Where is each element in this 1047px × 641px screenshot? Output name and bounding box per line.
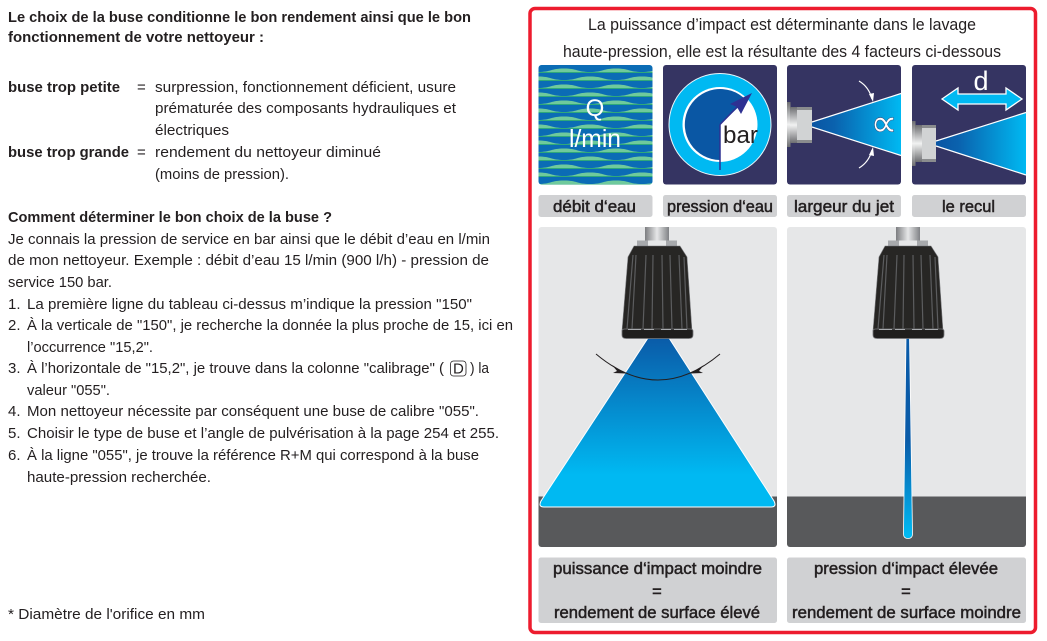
definition: nozzle too large — [8, 144, 381, 183]
numbered steps: À la ligne "055", je trouve la référence R+M qui correspond à la buse — [27, 447, 479, 464]
numbered steps: Mon nettoyeur nécessite par conséquent une buse de calibre "055". — [27, 403, 479, 420]
how-to paragraph: de mon nettoyeur. Exemple : débit d’eau 15 l/min (900 l/h) - pression de — [8, 252, 489, 269]
panel title: haute-pression, elle est la résultante des 4 facteurs ci-dessous — [563, 42, 1001, 61]
ground surface — [538, 496, 777, 547]
panel title — [563, 15, 1001, 61]
factor label: débit d'eau — [538, 195, 652, 217]
icon: pressure gauge: bar — [723, 122, 758, 149]
definition: nozzle too small — [8, 79, 457, 139]
panel: wide jet — [538, 227, 777, 547]
nozzle — [622, 227, 693, 338]
icon: water flow: Q — [586, 95, 604, 122]
nozzle — [873, 227, 944, 338]
needle jet — [904, 338, 912, 538]
definition: nozzle too small: = — [137, 79, 146, 96]
intro heading — [8, 9, 471, 46]
caption: wide jet: rendement de surface élevé — [554, 604, 760, 622]
panel title: La puissance d’impact est déterminante dans le lavage — [588, 15, 976, 34]
footnote: * Diamètre de l'orifice en mm — [8, 606, 205, 623]
caption: narrow jet: rendement de surface moindre — [792, 604, 1021, 622]
icon: jet width: ∝ — [870, 103, 898, 145]
factor label: largeur du jet — [787, 195, 901, 217]
factor label: largeur du jet: largeur du jet — [794, 198, 894, 216]
caption: wide jet — [538, 558, 777, 623]
how-to heading: Comment déterminer le bon choix de la buse ? — [8, 209, 332, 226]
icon: water flow — [538, 65, 652, 184]
panel: impact power frame — [530, 8, 1036, 632]
numbered steps: haute-pression recherchée. — [27, 469, 211, 486]
panel: narrow jet — [787, 227, 1026, 547]
definition: nozzle too small: prématurée des composants hydrauliques et — [155, 100, 457, 117]
icon: pressure gauge — [663, 65, 777, 184]
numbered steps: 3. — [8, 360, 21, 377]
numbered steps: 6. — [8, 447, 21, 464]
how-to paragraph: Je connais la pression de service en bar ainsi que le débit d’eau en l/min — [8, 231, 490, 248]
explanatory text column — [8, 9, 513, 623]
definition: nozzle too large: = — [137, 144, 146, 161]
intro heading: Le choix de la buse conditionne le bon rendement ainsi que le bon — [8, 9, 471, 26]
ground surface — [787, 496, 1026, 547]
numbered steps: D — [453, 360, 464, 378]
icon: jet width — [787, 65, 901, 184]
numbered steps: À l’horizontale de "15,2", je trouve dans la colonne "calibrage" ( — [27, 360, 444, 377]
caption: narrow jet — [787, 558, 1026, 623]
numbered steps: Choisir le type de buse et l’angle de pulvérisation à la page 254 et 255. — [27, 425, 499, 442]
factor label: le recul: le recul — [942, 198, 995, 216]
definition: nozzle too large: (moins de pression). — [155, 166, 289, 183]
caption: narrow jet: = — [901, 583, 911, 601]
factor label: débit d'eau: débit d‘eau — [553, 198, 636, 216]
numbered steps: valeur "055". — [27, 382, 110, 399]
intro heading: fonctionnement de votre nettoyeur : — [8, 29, 264, 46]
numbered steps: À la verticale de "150", je recherche la donnée la plus proche de 15, ici en — [27, 317, 513, 334]
icon: distance: d — [973, 66, 989, 96]
caption: wide jet: puissance d‘impact moindre — [553, 560, 762, 578]
definition: nozzle too small: surpression, fonctionnement déficient, usure — [155, 79, 456, 96]
numbered steps: 5. — [8, 425, 21, 442]
numbered steps — [8, 296, 513, 486]
icon: distance — [912, 65, 1026, 184]
caption: wide jet: = — [652, 583, 662, 601]
factor label: le recul — [912, 195, 1026, 217]
factor label: pression d'eau: pression d‘eau — [667, 198, 773, 216]
numbered steps: 2. — [8, 317, 21, 334]
definition: nozzle too small: buse trop petite — [8, 79, 120, 96]
how-to paragraph — [8, 231, 490, 291]
how-to paragraph: service 150 bar. — [8, 274, 112, 291]
angle arc with arrows — [596, 354, 720, 380]
definition: nozzle too large: buse trop grande — [8, 144, 129, 161]
numbered steps: ) la — [470, 360, 490, 377]
definition: nozzle too large: rendement du nettoyeur diminué — [155, 144, 381, 161]
definition: nozzle too small: électriques — [155, 122, 229, 139]
wide spray cone — [540, 338, 775, 507]
numbered steps: La première ligne du tableau ci-dessus m’indique la pression "150" — [27, 296, 472, 313]
caption: narrow jet: pression d‘impact élevée — [814, 560, 998, 578]
numbered steps: l’occurrence "15,2". — [27, 339, 153, 356]
numbered steps: 1. — [8, 296, 21, 313]
icon: water flow: l/min — [569, 125, 621, 153]
numbered steps: 4. — [8, 403, 21, 420]
